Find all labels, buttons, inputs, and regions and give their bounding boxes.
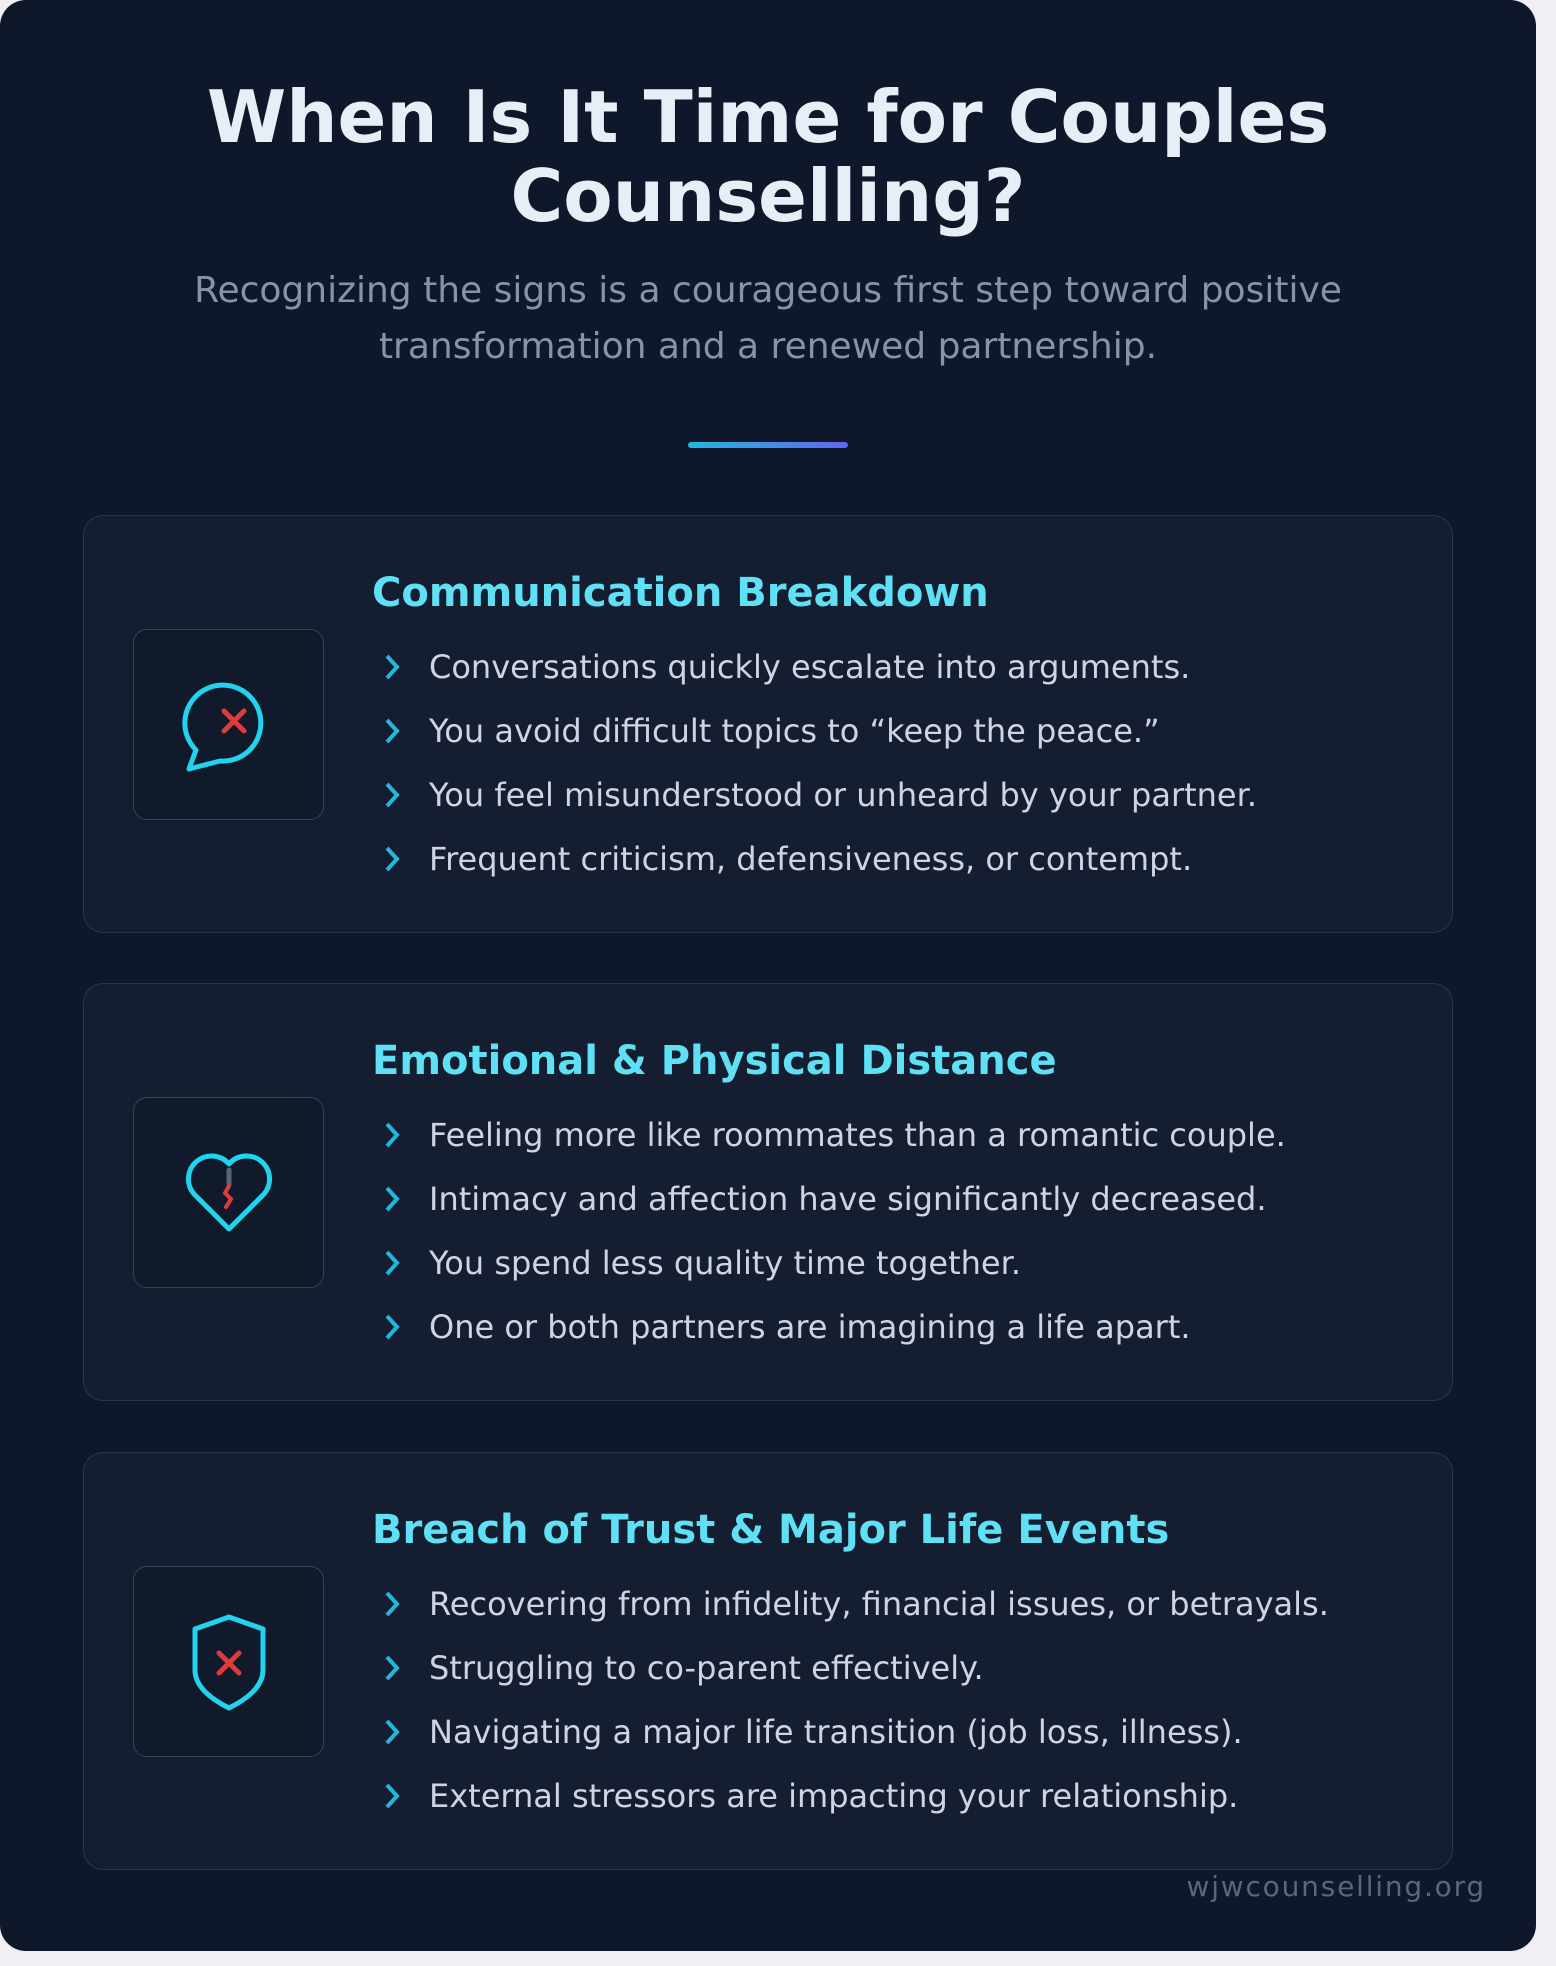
bullet list bbox=[386, 648, 1257, 878]
title bbox=[207, 75, 1329, 238]
bullet list bbox=[386, 1116, 1286, 1346]
heading: Emotional & Physical Distance bbox=[372, 1038, 1057, 1084]
subtitle bbox=[194, 270, 1342, 367]
bullet list: You avoid difficult topics to “keep the peace.” bbox=[429, 712, 1160, 750]
title: Counselling? bbox=[510, 154, 1026, 238]
subtitle: Recognizing the signs is a courageous first step toward positive bbox=[194, 270, 1342, 311]
bullet list: Navigating a major life transition (job loss, illness). bbox=[429, 1713, 1243, 1751]
heading: Communication Breakdown bbox=[372, 570, 989, 616]
panel: communication breakdown bbox=[83, 515, 1453, 933]
bullet list: Feeling more like roommates than a romantic couple. bbox=[429, 1116, 1286, 1154]
panel: emotional & physical distance bbox=[83, 983, 1453, 1401]
bullet list: Conversations quickly escalate into arguments. bbox=[429, 648, 1190, 686]
subtitle: transformation and a renewed partnership. bbox=[379, 326, 1157, 367]
divider accent bbox=[688, 442, 848, 448]
footer source: wjwcounselling.org bbox=[1186, 1870, 1486, 1903]
bullet list: Frequent criticism, defensiveness, or contempt. bbox=[429, 840, 1192, 878]
heading: Breach of Trust & Major Life Events bbox=[372, 1507, 1169, 1553]
icon: cracked heart bbox=[133, 1097, 324, 1288]
bullet list: Recovering from infidelity, financial issues, or betrayals. bbox=[429, 1585, 1329, 1623]
title: When Is It Time for Couples bbox=[207, 75, 1329, 159]
bullet list: Struggling to co-parent effectively. bbox=[429, 1649, 984, 1687]
panel: breach of trust bbox=[83, 1452, 1453, 1870]
bullet list: You feel misunderstood or unheard by your partner. bbox=[429, 776, 1257, 814]
icon: shield with x bbox=[133, 1566, 324, 1757]
icon: speech bubble with x bbox=[133, 629, 324, 820]
bullet list: Intimacy and affection have significantly decreased. bbox=[429, 1180, 1267, 1218]
bullet list bbox=[386, 1585, 1329, 1815]
bullet list: You spend less quality time together. bbox=[429, 1244, 1021, 1282]
bullet list: External stressors are impacting your relationship. bbox=[429, 1777, 1238, 1815]
bullet list: One or both partners are imagining a life apart. bbox=[429, 1308, 1191, 1346]
